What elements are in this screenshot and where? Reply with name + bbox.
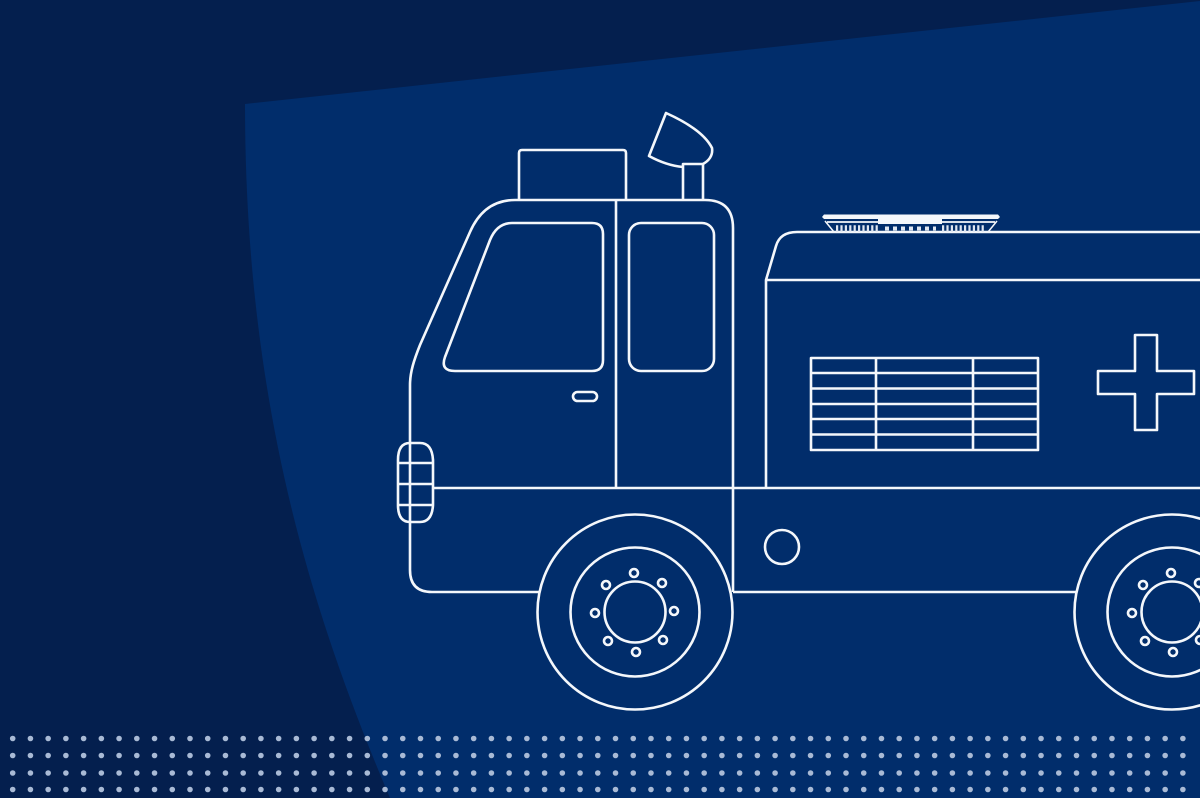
- roof light bar: [822, 214, 1000, 232]
- chassis lines: [433, 488, 1200, 592]
- door handle: [573, 392, 597, 401]
- spotlight stem: [683, 164, 703, 200]
- rear window: [629, 223, 714, 371]
- dotted band: [13, 738, 1200, 790]
- ambulance truck: [398, 113, 1200, 710]
- lighter blue curved panel: [245, 1, 1200, 798]
- rear body: [766, 232, 1200, 488]
- cab outline: [410, 200, 733, 592]
- front bumper light: [398, 443, 433, 522]
- door divider: [615, 200, 617, 488]
- roof box: [519, 150, 626, 200]
- roof spotlight: [649, 113, 712, 167]
- side grille: [811, 358, 1038, 450]
- front window: [444, 223, 603, 371]
- front wheel: [538, 514, 732, 710]
- filler cap: [765, 530, 799, 564]
- medical cross: [1098, 335, 1194, 430]
- rear wheel: [1074, 514, 1200, 710]
